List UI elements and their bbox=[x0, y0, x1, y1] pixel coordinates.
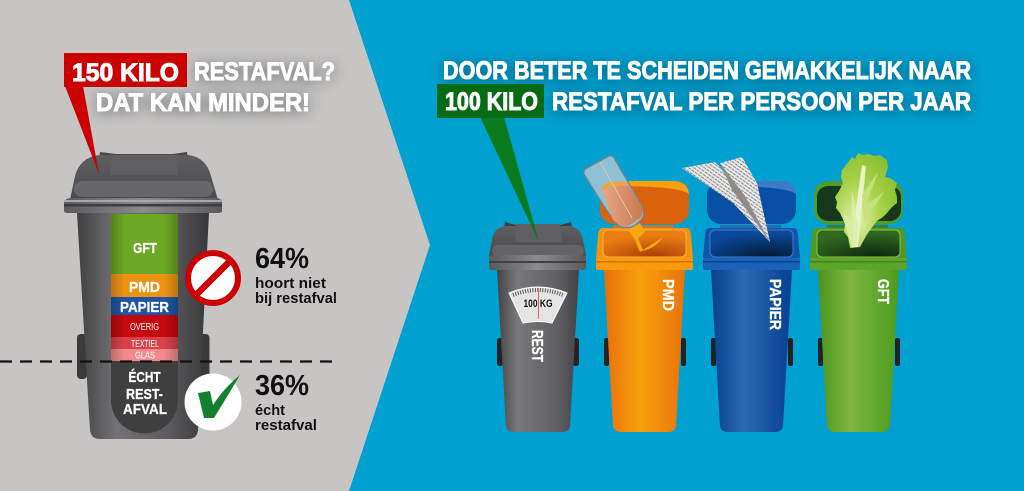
stat: 64 percent bbox=[255, 243, 337, 307]
layer: Glas bbox=[111, 349, 178, 362]
bin label: GFT bbox=[874, 279, 891, 304]
layer: GFT: GFT bbox=[133, 240, 157, 257]
layer: echt restafval: AFVAL bbox=[123, 401, 167, 418]
layer: echt restafval: REST- bbox=[126, 386, 163, 403]
stat: 64 percent: hoort niet bbox=[255, 276, 326, 292]
icon: newspaper plane bbox=[682, 157, 770, 242]
layer: Overig bbox=[111, 315, 178, 337]
title left bbox=[96, 58, 335, 117]
stat: 64 percent: 64% bbox=[255, 243, 309, 275]
layer: Glas: GLAS bbox=[135, 350, 155, 362]
layer: echt restafval: ÉCHT bbox=[128, 369, 160, 386]
scale: 100 kg: 100 KG bbox=[524, 298, 552, 310]
layer: Papier: PAPIER bbox=[120, 299, 169, 316]
panel: grey arrow-shaped left side bbox=[0, 0, 430, 491]
grey bin: rest bbox=[489, 222, 586, 432]
wheels bbox=[77, 334, 210, 379]
callout: red pointer with 150 kilo bbox=[64, 53, 187, 174]
layer: Textiel: TEXTIEL bbox=[131, 338, 159, 350]
bin label: REST bbox=[528, 330, 545, 362]
stat: 36 percent bbox=[255, 370, 317, 434]
title right bbox=[443, 57, 971, 116]
bin body bbox=[77, 213, 209, 439]
stat: 36 percent: restafval bbox=[255, 418, 317, 434]
stat: 64 percent: bij restafval bbox=[255, 291, 337, 307]
layer: PMD bbox=[111, 274, 178, 297]
bin label: PAPIER bbox=[766, 279, 783, 330]
bin label: PMD bbox=[659, 279, 676, 311]
callout: red pointer with 150 kilo: 150 KILO bbox=[72, 59, 179, 87]
icon: prohibition sign bbox=[188, 253, 238, 303]
large grey bin with waste layers bbox=[64, 152, 222, 439]
stat: 36 percent: 36% bbox=[255, 370, 309, 402]
scale: 100 kg bbox=[509, 287, 567, 323]
layer: Textiel bbox=[111, 337, 178, 350]
title right: RESTAFVAL PER PERSOON PER JAAR bbox=[552, 88, 971, 116]
title left: DAT KAN MINDER! bbox=[96, 89, 310, 117]
stat: 36 percent: écht bbox=[255, 403, 285, 419]
icon: lettuce leaf bbox=[835, 153, 897, 248]
icon: plastic bottle bbox=[584, 156, 663, 252]
layer: PMD: PMD bbox=[129, 279, 160, 296]
green bin: GFT bbox=[810, 181, 907, 432]
layer: Overig: OVERIG bbox=[130, 321, 159, 333]
bin lid bbox=[64, 152, 222, 213]
waste column bbox=[111, 214, 178, 434]
icon: check mark bbox=[184, 374, 242, 430]
layer: GFT bbox=[111, 214, 178, 274]
title left: RESTAFVAL? bbox=[194, 58, 335, 86]
green tail callout: 100 kilo: 100 KILO bbox=[445, 88, 538, 116]
dashed divider bbox=[0, 360, 334, 363]
blue bin: paper bbox=[703, 181, 800, 432]
layer: echt restafval bbox=[111, 361, 178, 434]
green tail callout: 100 kilo bbox=[437, 84, 544, 242]
orange bin: PMD bbox=[596, 181, 693, 432]
